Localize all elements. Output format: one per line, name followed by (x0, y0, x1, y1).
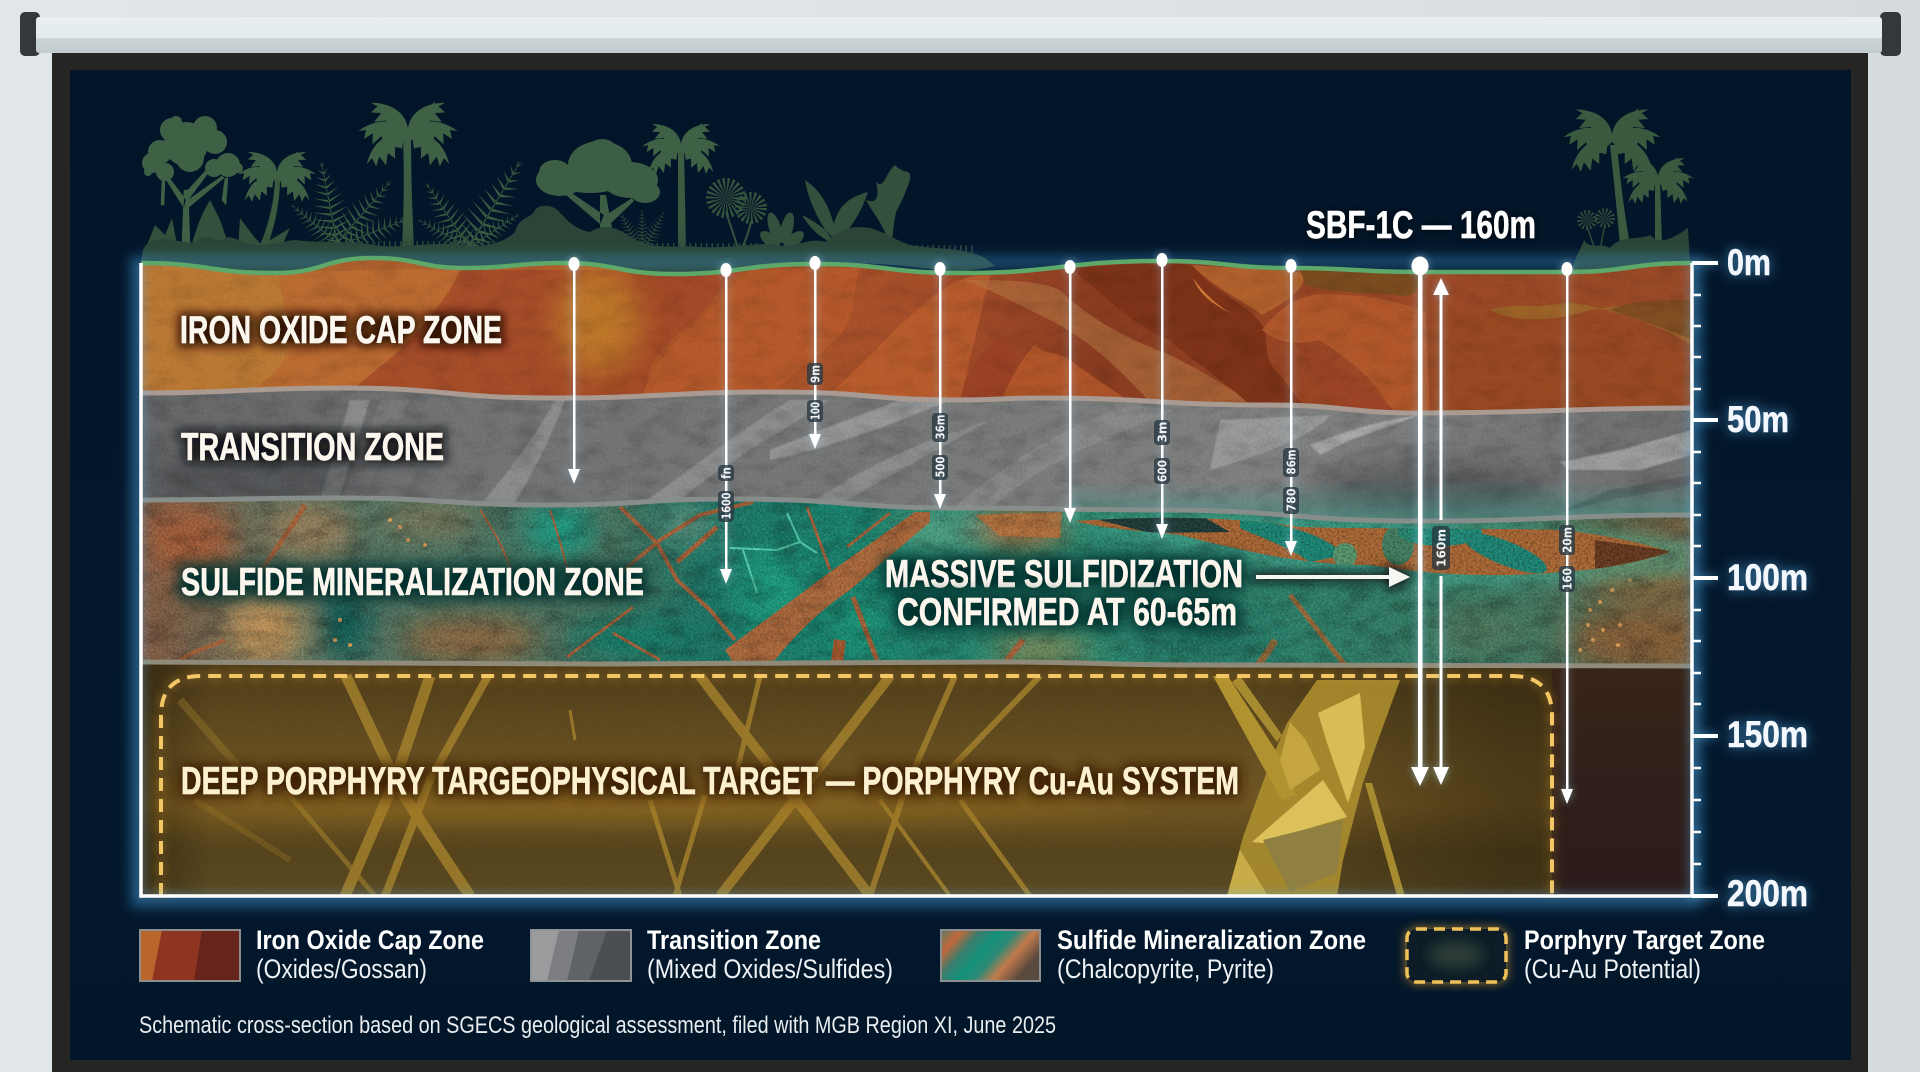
big textured copper vein (725, 512, 930, 665)
legend: transition zone: (Mixed Oxides/Sulfides) (647, 954, 893, 984)
iron oxide cap layer (142, 260, 1690, 410)
small leaf fern (611, 207, 673, 255)
drill hole at x1567: 160 (1560, 568, 1574, 590)
tree 2 (536, 139, 660, 228)
callout: massive sulfidization: MASSIVE SULFIDIZATION (885, 553, 1243, 596)
palm 1 (236, 144, 318, 245)
depth scale labels (1727, 242, 1808, 914)
jungle vegetation silhouette left (141, 93, 995, 274)
sulfide mineralization layer (141, 495, 1710, 670)
bright green veinlets (730, 513, 817, 593)
legend (140, 925, 1765, 984)
legend: iron oxide cap zone: Iron Oxide Cap Zone (256, 925, 484, 955)
copper veins (175, 502, 1345, 665)
drill hole at x1291: 86m (1284, 450, 1298, 474)
drill hole at x940 (932, 262, 948, 509)
depth scale labels: 200m (1727, 873, 1808, 914)
source footnote: Schematic cross-section based on SGECS geological assessment, filed with MGB Region XI, June 2025 (139, 1012, 1056, 1039)
layer boundary lines (141, 258, 1692, 666)
projector roller (20, 12, 1901, 56)
drill hole at x940: 500 (933, 456, 947, 478)
label: deep porphyry target: DEEP PORPHYRY TARGEOPHYSICAL TARGET — PORPHYRY Cu-Au SYSTEM (181, 760, 1239, 803)
drill hole at x1162 (1154, 253, 1170, 539)
drill hole at x1291: 780 (1284, 488, 1298, 512)
callout: massive sulfidization: CONFIRMED AT 60-65m (897, 591, 1237, 634)
axis glow behind plot (136, 262, 1696, 902)
drill hole at x815: 100 (808, 402, 822, 420)
depth scale labels: 150m (1727, 714, 1808, 755)
depth scale labels: 0m (1727, 242, 1771, 283)
drill hole at x815 (807, 256, 823, 449)
main drill hole SBF-1C (1411, 256, 1429, 786)
tall palm (1561, 100, 1663, 245)
callout: massive sulfidization (885, 553, 1410, 634)
legend: sulfide mineralization zone (941, 925, 1366, 984)
cross-section layers (140, 258, 1710, 900)
label: transition zone: TRANSITION ZONE (181, 426, 444, 469)
fern 1 (283, 158, 416, 258)
legend: transition zone: Transition Zone (647, 925, 821, 955)
drill hole at x574 (568, 257, 580, 484)
drill holes (568, 253, 1575, 804)
copper specks (333, 518, 1632, 652)
pale teal lens halo (1050, 514, 1690, 586)
drill hole at x726: 1600 (719, 492, 733, 520)
label: SBF-1C hole: SBF-1C — 160m (1306, 204, 1536, 247)
label: iron oxide cap zone: IRON OXIDE CAP ZONE (180, 309, 502, 352)
leafy shrub (757, 211, 807, 252)
drill hole at x940: 36m (933, 414, 947, 440)
plot axes frame (141, 263, 1692, 896)
drill hole at x726 (718, 263, 734, 584)
palm 2 (356, 93, 460, 248)
depth scale ticks (1692, 263, 1718, 896)
jungle vegetation silhouette right (1561, 100, 1695, 272)
drill hole at x1070 (1064, 260, 1076, 523)
legend: iron oxide cap zone (140, 925, 484, 984)
drill hole at x1291 (1283, 259, 1299, 556)
fern 2 (411, 150, 540, 259)
small fan plants (1582, 213, 1610, 250)
label: sulfide mineralization zone: SULFIDE MINERALIZATION ZONE (181, 561, 644, 604)
bush under tree 1 (145, 200, 290, 250)
depth measure arrow 160m: 160m (1434, 529, 1448, 567)
broad leaf plants (802, 165, 910, 243)
legend: sulfide mineralization zone: Sulfide Mineralization Zone (1057, 925, 1366, 955)
massive sulfide ore lens (1070, 510, 1680, 581)
depth measure arrow 160m (1432, 278, 1450, 785)
porphyry target layer (141, 660, 1692, 900)
undergrowth (141, 206, 995, 274)
small fan palms (716, 188, 759, 248)
transition zone layer (140, 385, 1692, 525)
legend: iron oxide cap zone: (Oxides/Gossan) (256, 954, 427, 984)
palm 3 (640, 116, 722, 248)
short palm (1621, 151, 1695, 245)
drill hole at x1162: 600 (1155, 460, 1169, 482)
depth scale labels: 50m (1727, 399, 1789, 440)
drill hole at x1567: 20m (1560, 527, 1574, 553)
porphyry target dashed outline (161, 676, 1552, 896)
drill hole at x1567 (1559, 262, 1575, 804)
legend: porphyry target zone: Porphyry Target Zone (1524, 925, 1765, 955)
depth scale labels: 100m (1727, 557, 1808, 598)
tree 1 (142, 116, 243, 243)
right undergrowth (1572, 228, 1690, 272)
legend: porphyry target zone (1407, 925, 1765, 984)
legend: sulfide mineralization zone: (Chalcopyrite, Pyrite) (1057, 954, 1274, 984)
drill hole at x815: 9m (808, 365, 822, 383)
legend: porphyry target zone: (Cu-Au Potential) (1524, 954, 1701, 984)
large vein stockwork (1213, 676, 1405, 896)
grass tufts (290, 246, 975, 250)
drill hole at x726: fn (719, 467, 733, 479)
gold veins (180, 676, 1040, 896)
glow band behind label (150, 793, 1150, 817)
drill hole at x1162: 3m (1155, 422, 1169, 442)
colour blotches (145, 500, 1710, 670)
legend: transition zone (531, 925, 893, 984)
copper top blotch (975, 512, 1062, 538)
callout arrow (1256, 567, 1410, 587)
